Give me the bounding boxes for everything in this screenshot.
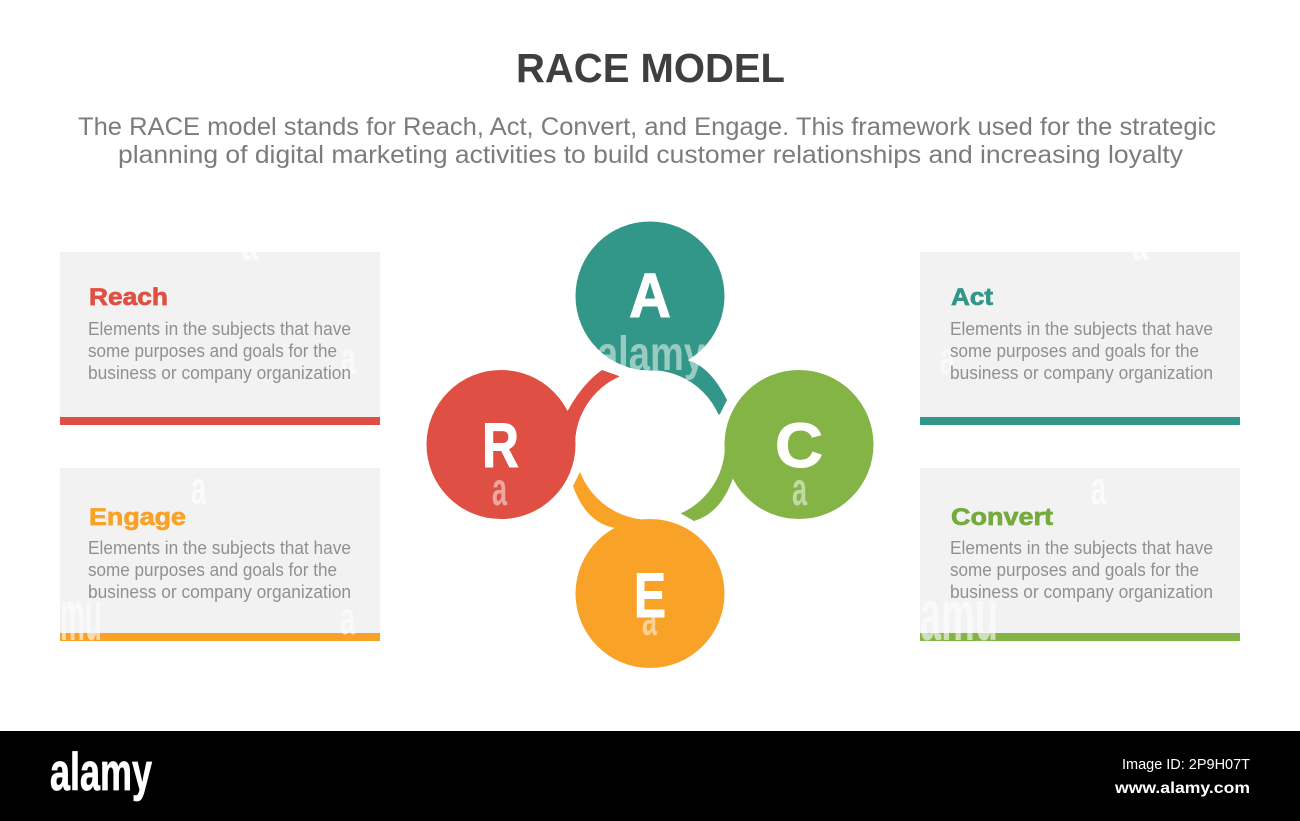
text: Act description: some purposes and goals for the [950, 341, 1199, 361]
circle: A [576, 222, 724, 370]
watermark: center alamy: alamy [597, 328, 705, 381]
arc: orange connector [573, 445, 650, 528]
footer url: www.alamy.com [1114, 780, 1250, 797]
title: RACE MODEL [516, 45, 785, 91]
panel: Convert [920, 462, 1240, 656]
heading: Reach: Reach [89, 284, 168, 311]
circle: R [426, 370, 576, 519]
text: Convert description: some purposes and goals for the [950, 560, 1199, 580]
circle: E: E [634, 561, 666, 631]
panel: Reach: a [341, 332, 356, 384]
arc: teal connector [650, 360, 727, 445]
text: Act description [950, 319, 1213, 383]
text: Reach description: some purposes and goals for the [88, 341, 337, 361]
panel: Engage: a [191, 462, 206, 514]
text: Convert description [950, 538, 1213, 602]
text: Engage description: business or company organization [88, 582, 351, 602]
panel: Engage: mu [60, 576, 102, 656]
heading: Convert: Convert [951, 504, 1053, 531]
footer bar [0, 731, 1300, 821]
text: Reach description [88, 319, 351, 383]
panel: Act: a [1132, 218, 1148, 270]
panel: Act [920, 218, 1240, 425]
text: Convert description: Elements in the subjects that have [950, 538, 1213, 558]
text: Reach description: Elements in the subjects that have [88, 319, 351, 339]
circle: A: A [629, 261, 671, 331]
heading: Act: Act [951, 284, 993, 311]
arc: red connector [567, 370, 650, 445]
circle: C [724, 370, 874, 519]
panel: Reach: a [242, 218, 258, 270]
panel: Act: a [940, 332, 955, 384]
heading: Engage: Engage [89, 504, 186, 531]
panel: Engage: a [340, 592, 355, 644]
footer logo: alamy [50, 743, 152, 802]
circle: C: a [792, 463, 807, 515]
subtitle text [78, 113, 1216, 169]
arc: green connector [650, 445, 733, 521]
panel: Engage [60, 462, 380, 656]
subtitle text: The RACE model stands for Reach, Act, Convert, and Engage. This framework used for the strategic [78, 113, 1216, 141]
circle: E [576, 519, 724, 668]
circle: R: R [482, 411, 519, 481]
subtitle text: planning of digital marketing activities to build customer relationships and increasing loyalty [118, 141, 1184, 169]
text: Engage description [88, 538, 351, 602]
circle: E: a [642, 593, 657, 645]
circle: R: a [492, 463, 507, 515]
text: Convert description: business or company organization [950, 582, 1213, 602]
text: Engage description: Elements in the subjects that have [88, 538, 351, 558]
panel: Convert: a [1091, 462, 1106, 514]
text: Act description: business or company organization [950, 363, 1213, 383]
circle: C: C [775, 411, 823, 481]
text: Act description: Elements in the subjects that have [950, 319, 1213, 339]
panel: Reach [60, 218, 380, 425]
text: Reach description: business or company organization [88, 363, 351, 383]
circle: center [575, 370, 725, 520]
panel: Convert: amu [920, 576, 998, 656]
diagram: RACE circular flow [426, 222, 874, 668]
text: Engage description: some purposes and goals for the [88, 560, 337, 580]
footer image id: Image ID: 2P9H07T [1122, 756, 1250, 773]
